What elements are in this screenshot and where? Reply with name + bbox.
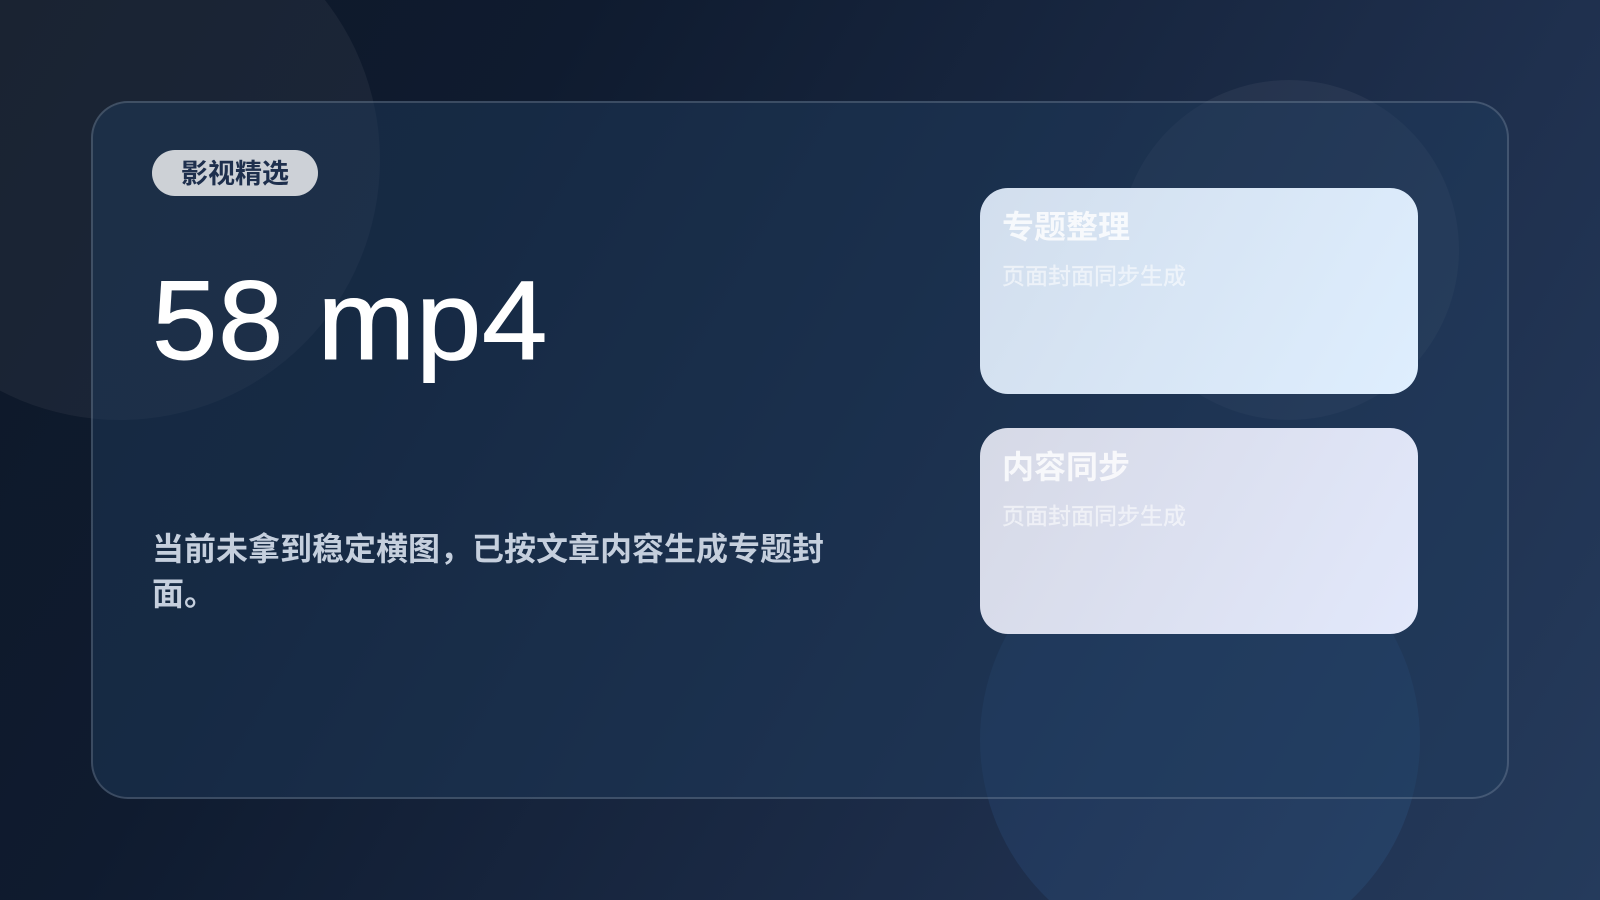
category badge: 影视精选 [181, 159, 289, 189]
card subtitle: 页面封面同步生成 [1002, 503, 1186, 529]
decorative circle: bottom right [980, 520, 1420, 900]
card title: 内容同步 [1002, 449, 1130, 485]
card: topic curation [980, 188, 1418, 394]
card subtitle: 页面封面同步生成 [1002, 263, 1186, 289]
decorative circle: top right [1119, 80, 1459, 420]
main panel [91, 101, 1509, 799]
card: content sync [980, 428, 1418, 634]
decorative circle: top left [0, 0, 380, 420]
card title: 专题整理 [1002, 209, 1130, 245]
description: 当前未拿到稳定横图，已按文章内容生成专题封面。 [152, 531, 824, 612]
category badge [152, 150, 318, 196]
title: 58 mp4 [152, 258, 548, 383]
